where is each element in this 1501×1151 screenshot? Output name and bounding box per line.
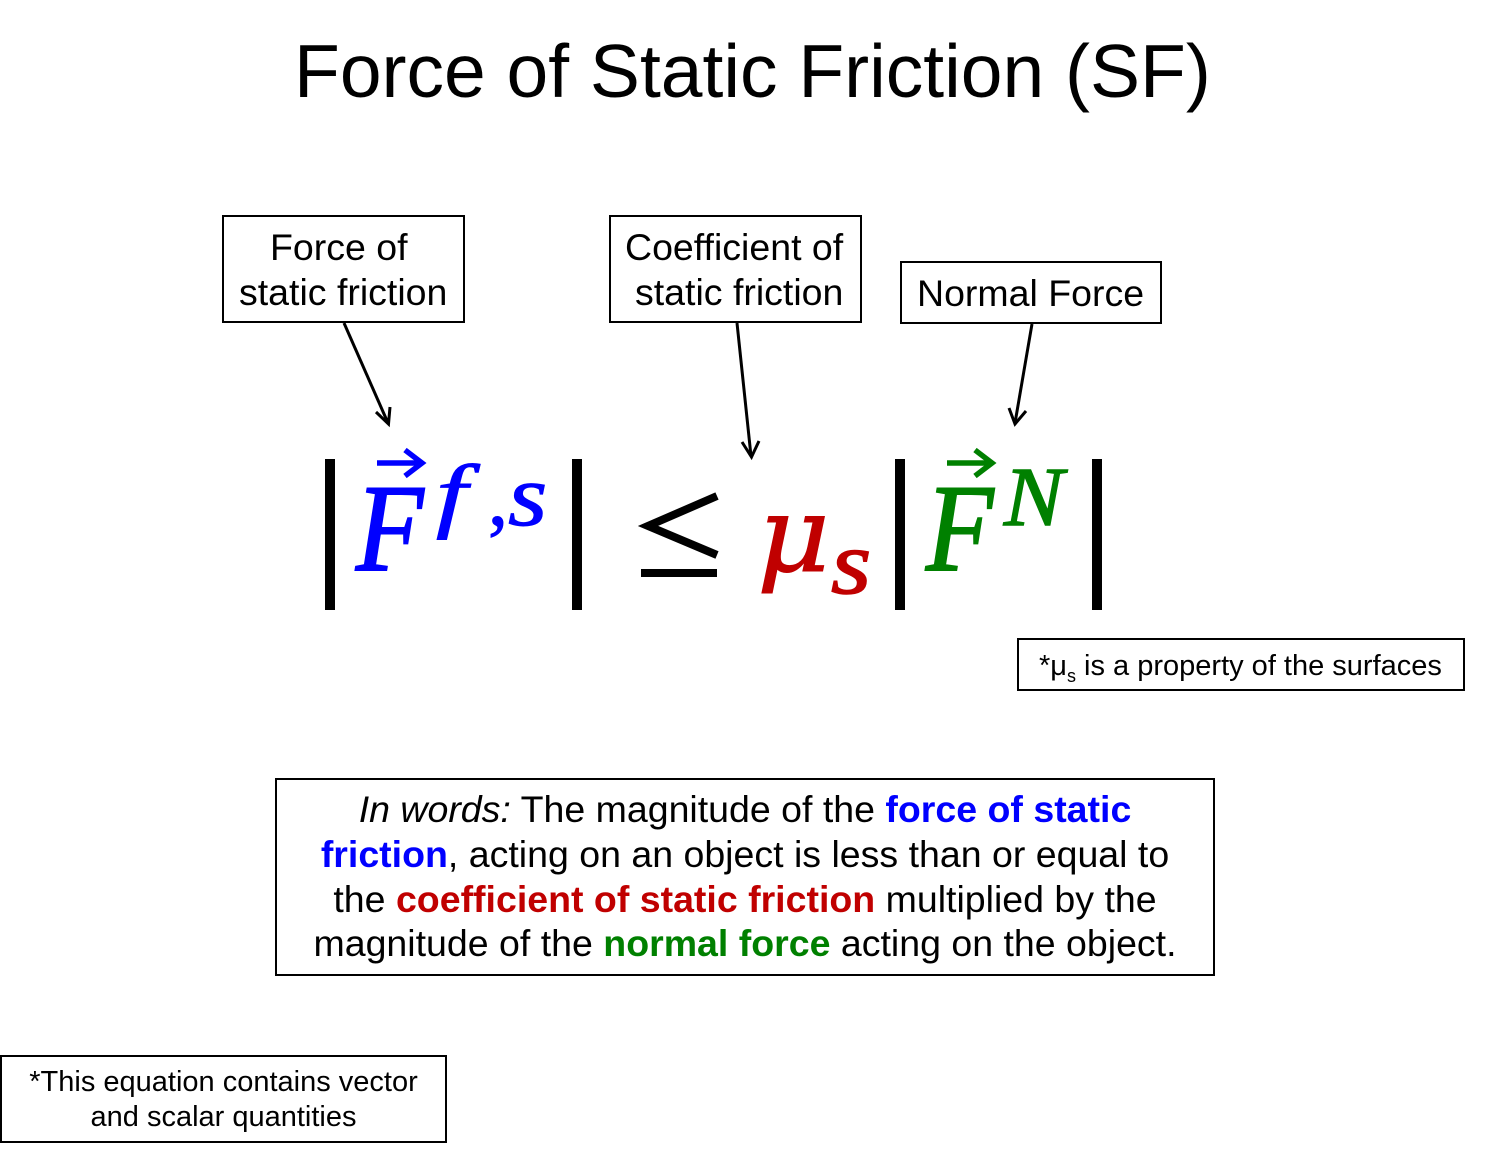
right bar xyxy=(572,459,582,610)
F vector N: N xyxy=(1003,450,1068,543)
less or equal xyxy=(641,496,717,573)
note: vector and scalar xyxy=(0,1055,447,1143)
in words box: magnitude of the normal force acting on the object. xyxy=(313,922,1177,964)
F vector f,s: s xyxy=(508,447,547,544)
arrow over F2 xyxy=(947,450,992,476)
F vector f,s xyxy=(355,447,547,597)
left bar 2 xyxy=(895,459,905,610)
arrow over F xyxy=(377,450,422,476)
F vector f,s: F xyxy=(355,460,425,597)
label: force of static friction: static friction xyxy=(239,271,447,313)
note: vector and scalar: *This equation contains vector xyxy=(29,1066,418,1098)
in words box: In words: The magnitude of the force of static xyxy=(359,788,1131,830)
label: force of static friction: Force of xyxy=(270,226,408,268)
right bar 2 xyxy=(1092,459,1102,610)
note: vector and scalar: and scalar quantities xyxy=(90,1101,356,1133)
label: force of static friction xyxy=(222,215,465,323)
title: Force of Static Friction (SF) xyxy=(294,29,1211,113)
in words box xyxy=(275,778,1215,976)
left bar xyxy=(325,459,335,610)
label: normal force: Normal Force xyxy=(917,272,1144,314)
F vector N: F xyxy=(925,460,995,597)
label: normal force xyxy=(900,261,1162,324)
mu s: s xyxy=(831,513,871,612)
label: coefficient of static friction: static friction xyxy=(635,271,843,313)
in words box: friction, acting on an object is less than or equal to xyxy=(321,833,1169,875)
F vector N xyxy=(925,450,1068,597)
mu s xyxy=(757,473,871,612)
label: coefficient of static friction xyxy=(609,215,862,323)
in words box: the coefficient of static friction multiplied by the xyxy=(333,878,1157,920)
note: mu s: *μs is a property of the surfaces xyxy=(1039,650,1442,686)
label: coefficient of static friction: Coefficient of xyxy=(625,226,843,268)
mu s: μ xyxy=(757,473,830,596)
F vector f,s: f xyxy=(436,449,480,541)
F vector f,s: , xyxy=(488,455,508,543)
note: mu s xyxy=(1017,638,1465,691)
